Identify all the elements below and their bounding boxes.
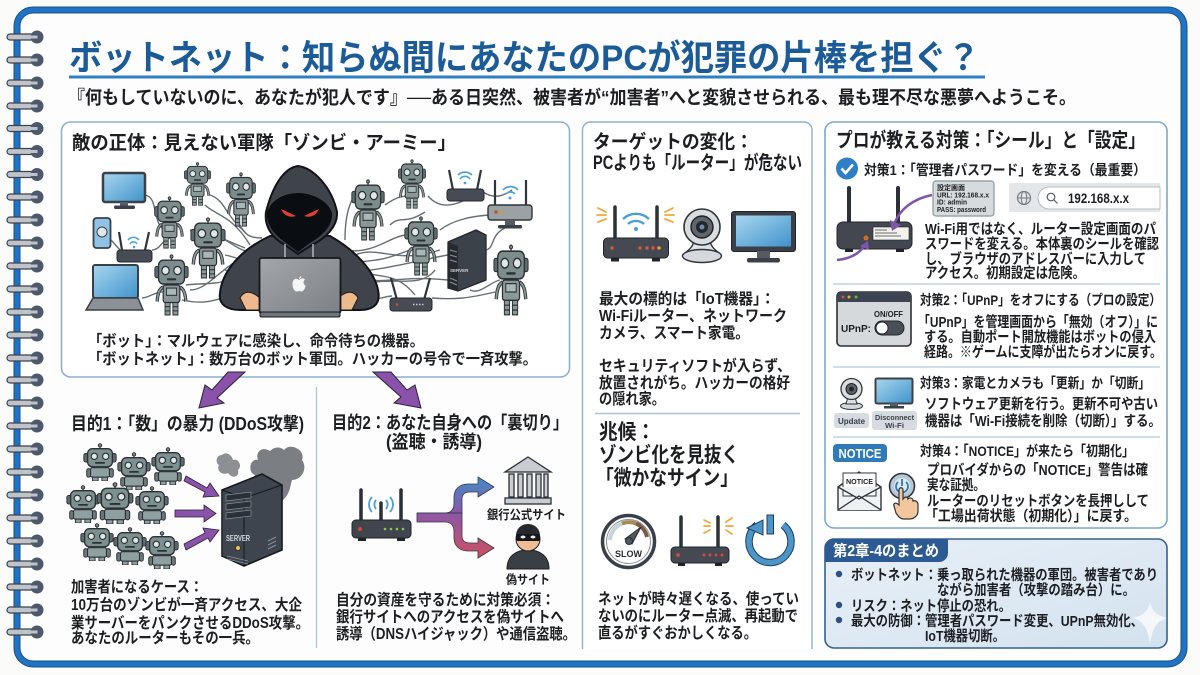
icon: laptop — [86, 265, 143, 310]
icon: monitor — [732, 212, 796, 262]
icon: notice envelope: NOTICE — [846, 479, 873, 486]
signs text: ないのにルーター点滅、再起動で — [598, 606, 798, 625]
icon: bank — [505, 457, 551, 504]
measure 2 text: する。自動ポート開放機能はボットの侵入 — [924, 328, 1156, 346]
icon: UPnP settings window — [837, 292, 911, 346]
heading: target change: ターゲットの変化： — [593, 131, 753, 153]
arrow: to purpose 1 — [199, 372, 245, 408]
summary text: IoT機器切断。 — [925, 628, 1005, 645]
icon: webcam update: Update — [838, 416, 865, 426]
heading: signs: 兆候： — [599, 421, 655, 444]
icon: router with sticker — [837, 188, 912, 252]
measure 1 text — [925, 221, 1159, 282]
heading: purpose 1: 目的1：「数」の暴力 (DDoS攻撃) — [71, 413, 304, 434]
heading: purpose 2: (盗聴・誘導) — [386, 432, 482, 452]
heading: signs: 「微かなサイン」 — [596, 467, 738, 490]
panel: purpose 2 betrayal — [332, 413, 576, 643]
NOTICE badge — [833, 444, 887, 462]
network wires — [111, 190, 512, 302]
protection text — [336, 590, 576, 643]
case text: 10万台のゾンビが一斉アクセス、大企 — [71, 595, 302, 614]
summary badge: 第2章-4のまとめ — [833, 541, 939, 560]
icon: UPnP settings window: UPnP: — [841, 324, 871, 335]
sticker callout: PASS: password — [937, 207, 986, 214]
definition text: 「ボット」：マルウェアに感染し、命令待ちの機器。 — [88, 331, 424, 350]
spiral binding rings — [7, 30, 44, 638]
icon: monitor disconnect: Disconnect — [875, 413, 914, 422]
heading: measure 1: 対策1：「管理者パスワード」を変える（最重要） — [864, 162, 1146, 178]
icon: router right — [488, 180, 532, 228]
case text: 業サーバーをパンクさせるDDoS攻撃。 — [71, 614, 309, 632]
heading: enemy identity: 敵の正体：見えない軍隊「ゾンビ・アーミー」 — [72, 132, 456, 154]
browser address bar: 192.168.x.x — [1068, 190, 1129, 206]
measure 4 text: 実な証拠。 — [927, 476, 985, 494]
icon: check mark — [836, 158, 858, 180]
measure 2 text — [918, 313, 1162, 361]
measure 1 text: し、ブラウザのアドレスバーに入力して — [925, 250, 1146, 268]
case text: 加害者になるケース： — [71, 577, 203, 596]
IoT text — [599, 289, 791, 408]
icon: power restart — [747, 515, 791, 562]
attack arrows — [175, 476, 219, 550]
protection text: 銀行サイトへのアクセスを偽サイトへ — [336, 608, 564, 626]
heading: signs: ゾンビ化を見抜く — [599, 444, 739, 467]
definition text — [88, 331, 537, 368]
icon: router left — [117, 232, 152, 262]
icon: router with wifi — [597, 207, 674, 262]
sticker callout: URL: 192.168.x.x — [937, 192, 989, 200]
arrow: split to bank and fake site — [417, 477, 494, 558]
sticker callout — [933, 181, 994, 216]
icon: server tower — [448, 230, 486, 291]
icon: router wifi — [352, 490, 411, 541]
arrows: sticker and port — [837, 195, 932, 260]
icon: sparkle — [1133, 602, 1167, 645]
icon: apple logo — [292, 276, 306, 292]
icon: monitor — [103, 173, 145, 209]
arrow: to purpose 2 — [373, 372, 421, 408]
IoT text: セキュリティソフトが入らず、 — [599, 356, 791, 375]
summary text: ながら加害者（攻撃の踏み台）に。 — [937, 581, 1135, 599]
heading: target change: PCよりも「ルーター」が危ない — [593, 151, 802, 174]
icon: router bottom — [390, 278, 432, 311]
IoT text: の隠れ家。 — [599, 390, 665, 408]
icon: server with smoke: SERVER — [226, 534, 250, 543]
robot swarm — [67, 444, 184, 569]
heading: measure 4: 対策4：「NOTICE」が来たら「初期化」 — [920, 443, 1134, 459]
heading: measure 3: 対策3：家電とカメラも「更新」か「切断」 — [920, 375, 1150, 391]
measure 4 text: ルーターのリセットボタンを長押しして — [927, 492, 1149, 510]
measure 1 text: Wi-Fi用ではなく、ルーター設定画面のパ — [925, 221, 1156, 238]
icon: slow gauge: SLOW — [615, 549, 642, 560]
measure 3 text — [925, 396, 1161, 430]
icon: UPnP settings window: ON/OFF — [874, 309, 903, 319]
icon: slow gauge — [602, 516, 654, 568]
signs text: ネットが時々遅くなる、使ってい — [598, 589, 799, 608]
heading: purpose 2 — [332, 413, 568, 452]
robots around the hacker — [155, 160, 528, 315]
NOTICE badge: NOTICE — [838, 447, 882, 461]
measure 3 text: 機器は「Wi-Fi接続を削除（切断）」する。 — [925, 412, 1161, 430]
heading: countermeasures: プロが教える対策：「シール」と「設定」 — [836, 128, 1145, 152]
protection text: 誘導（DNSハイジャック）や通信盗聴。 — [336, 624, 576, 643]
panel: enemy identity — [62, 122, 570, 377]
signs text — [598, 589, 799, 642]
summary bullets — [836, 571, 842, 623]
measure 3 text: ソフトウェア更新を行う。更新不可や古い — [925, 396, 1158, 413]
panel: target change and signs — [582, 122, 812, 649]
summary text: リスク：ネット停止の恐れ。 — [851, 597, 1011, 615]
measure 4 text: プロバイダからの「NOTICE」警告は確 — [927, 461, 1148, 479]
panel: countermeasures — [825, 122, 1167, 528]
IoT text: カメラ、スマート家電。 — [599, 324, 749, 342]
title: ボットネット：知らぬ間にあなたのPCが犯罪の片棒を担ぐ？ — [69, 39, 980, 78]
icon: smartphone — [94, 218, 110, 248]
IoT text: 最大の標的は「IoT機器」： — [599, 289, 775, 308]
case text: あなたのルーターもその一兵。 — [71, 628, 259, 647]
icon: reset button and hand — [890, 474, 918, 519]
icon: router top right — [447, 170, 484, 201]
panel: chapter summary — [825, 539, 1167, 648]
definition text: 「ボットネット」：数万台のボット軍団。ハッカーの号令で一斉攻撃。 — [88, 349, 537, 368]
measure 1 text: スワードを変える。本体裏のシールを確認 — [925, 235, 1159, 253]
IoT text: Wi-Fiルーター、ネットワーク — [599, 307, 787, 325]
sticker callout: 設定画面 — [937, 184, 965, 192]
heading: target change — [593, 131, 802, 174]
hacker with laptop — [220, 166, 379, 317]
case text — [71, 577, 309, 647]
panel: purpose 1 DDoS — [67, 413, 309, 647]
icon: monitor disconnect — [872, 378, 917, 430]
label: official bank site: 銀行公式サイト — [487, 507, 566, 522]
measure 4 text: 「工場出荷状態（初期化）」に戻す。 — [925, 507, 1137, 525]
heading: purpose 2: 目的2：あなた自身への「裏切り」 — [332, 413, 568, 433]
browser address bar — [1009, 183, 1160, 212]
icon: server with smoke — [217, 447, 304, 566]
icon: blinking router — [671, 517, 733, 566]
icon: notice envelope — [838, 472, 881, 510]
measure 4 text — [925, 461, 1149, 525]
icon: thief — [507, 524, 549, 569]
measure 1 text: アクセス。初期設定は危険。 — [925, 264, 1085, 282]
summary text — [851, 567, 1158, 645]
subtitle: 『何もしていないのに、あなたが犯人です』──ある日突然、被害者が“加害者”へと変貌させられる、最も理不尽な悪夢へようこそ。 — [68, 87, 1076, 108]
sticker callout: ID: admin — [937, 200, 967, 206]
divider between purposes — [316, 387, 318, 648]
signs text: 直るがすぐおかしくなる。 — [598, 623, 757, 642]
summary badge — [825, 539, 948, 562]
IoT text: 放置されがち。ハッカーの格好 — [599, 373, 790, 392]
icon: server tower: SERVER — [450, 268, 469, 273]
summary text: 最大の防御：管理者パスワード変更、UPnP無効化、 — [851, 612, 1143, 630]
protection text: 自分の資産を守るために対策必須： — [336, 590, 555, 609]
label: fake site: 偽サイト — [506, 572, 550, 587]
icon: monitor disconnect: Wi-Fi — [885, 421, 904, 430]
icon: webcam update — [834, 378, 869, 428]
icon: webcam — [682, 209, 722, 262]
heading: signs — [596, 421, 739, 490]
